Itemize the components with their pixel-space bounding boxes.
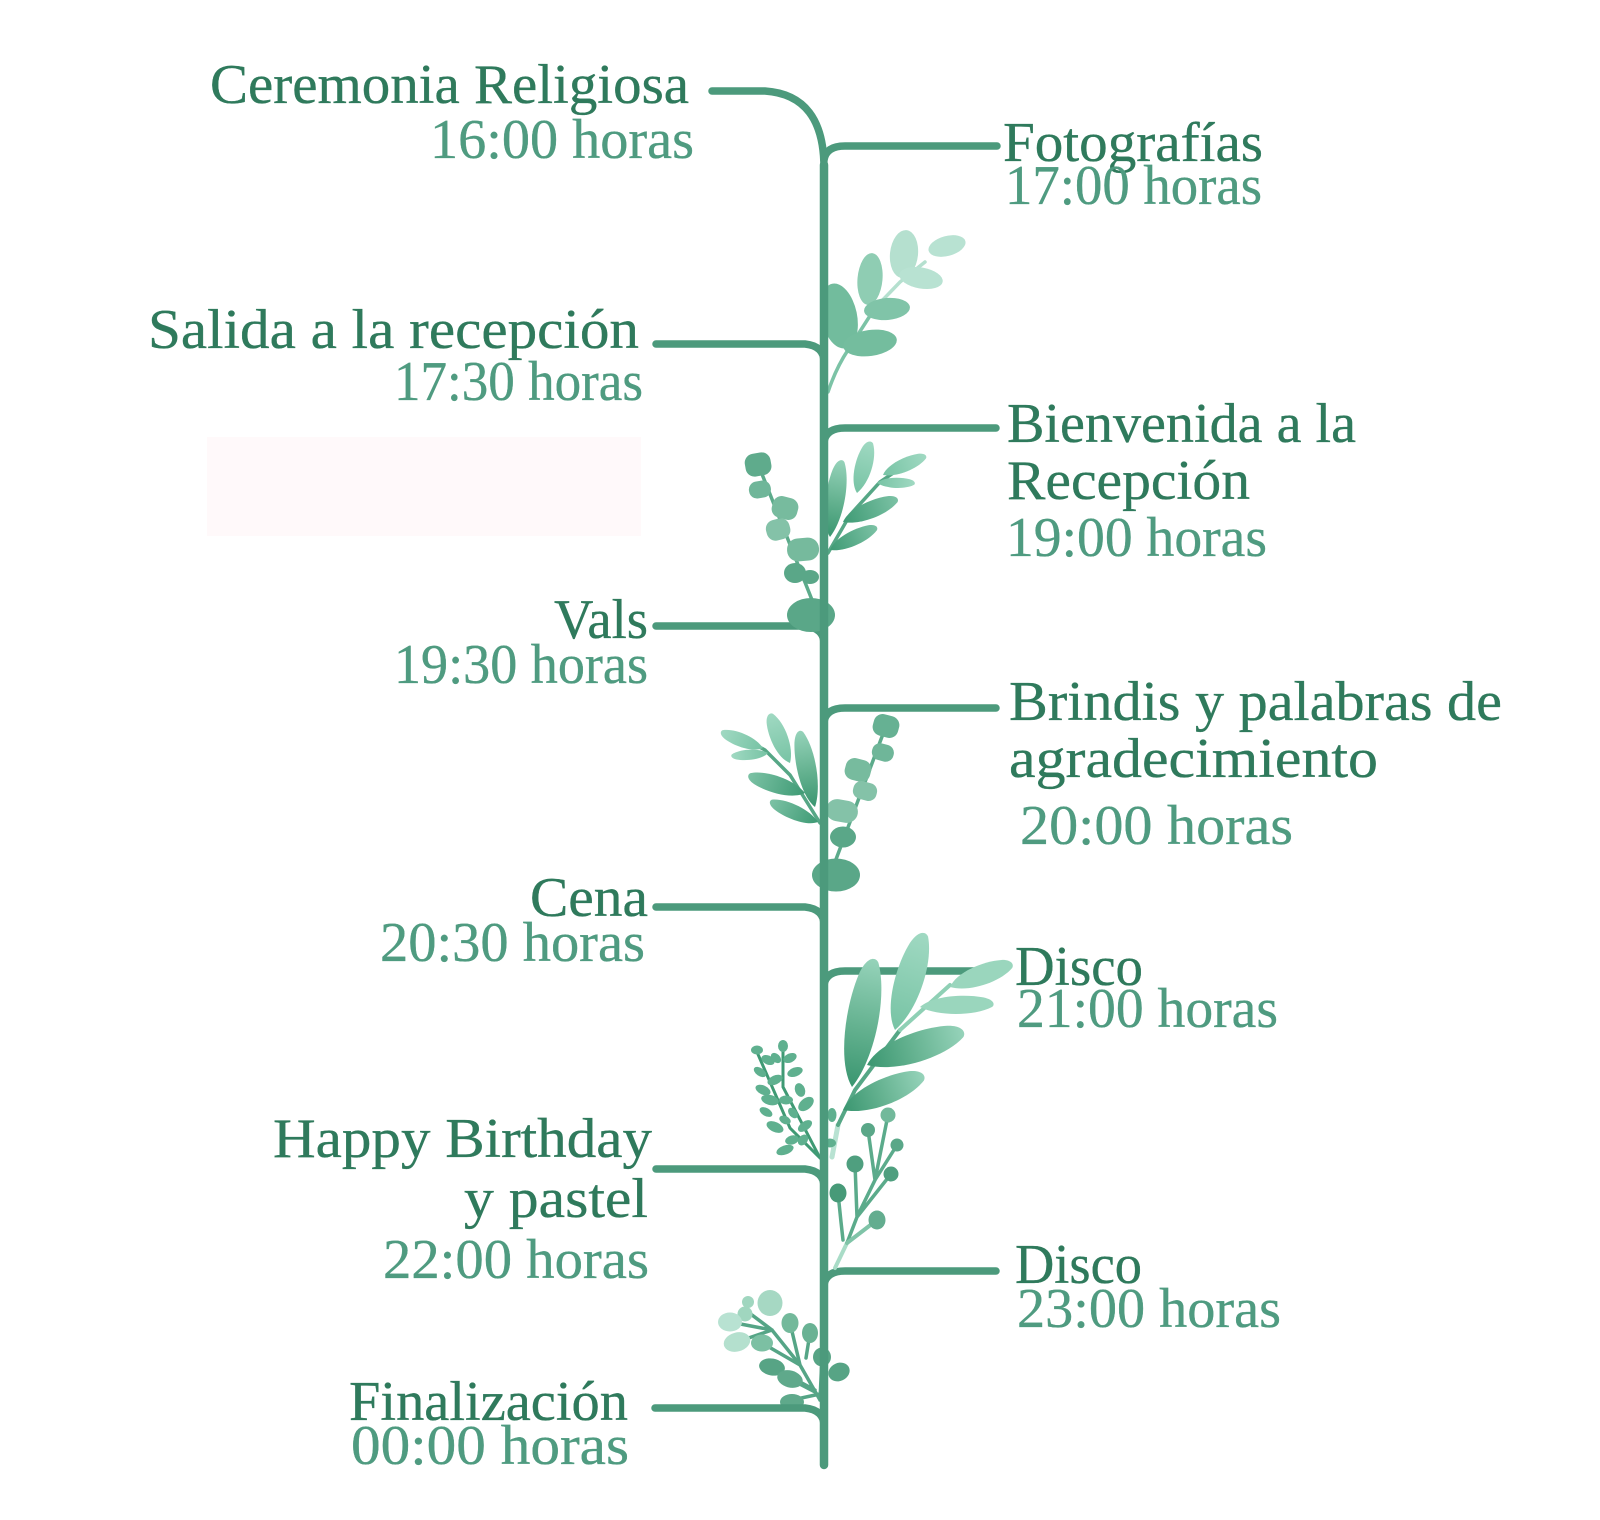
event: Ceremonia Religiosa: [210, 54, 694, 171]
event: Happy Birthday y pastel: y pastel: [464, 1168, 648, 1230]
event: Brindis y palabras de agradecimiento: 20:00 horas: [1020, 795, 1293, 857]
plant: left eucalyptus sprig: [743, 451, 835, 632]
plant: top oval-leaf sprig: [815, 229, 968, 392]
event: Vals: [394, 589, 648, 696]
plant: large leaf sprig: [832, 929, 1016, 1157]
event: Disco 21:00: Disco: [1015, 936, 1143, 998]
event: Finalización: [349, 1371, 629, 1477]
connector: Fotografías: [824, 146, 997, 160]
event: Cena: 20:30 horas: [380, 912, 645, 974]
event: Brindis y palabras de agradecimiento: [1009, 671, 1502, 857]
connector: Vals: [656, 626, 824, 644]
event: Disco 23:00: [1015, 1234, 1281, 1340]
connector: Finalización: [655, 1408, 824, 1426]
event: Cena: Cena: [530, 867, 648, 929]
event: Bienvenida a la Recepción: Recepción: [1007, 450, 1250, 512]
event: Bienvenida a la Recepción: Bienvenida a la: [1007, 393, 1356, 455]
pale pink rectangle: [207, 437, 641, 536]
plant: fern sprig: [751, 1040, 836, 1158]
plant: middle right eucalyptus sprig: [812, 712, 901, 892]
event: Finalización: Finalización: [349, 1371, 628, 1433]
event: Happy Birthday y pastel: Happy Birthday: [273, 1108, 652, 1170]
event: Vals: Vals: [554, 589, 648, 651]
event: Disco 23:00: 23:00 horas: [1017, 1278, 1281, 1340]
event: Disco 21:00: [1015, 936, 1278, 1040]
event: Bienvenida a la Recepción: [1006, 393, 1356, 569]
plant: bottom round-leaf sprig: [718, 1290, 853, 1410]
event: Salida a la recepción: 17:30 horas: [394, 351, 643, 413]
event: Disco 23:00: Disco: [1015, 1234, 1142, 1296]
event: Salida a la recepción: [148, 299, 643, 413]
plant: berry sprig: [830, 1108, 904, 1268]
event: Fotografías: 17:00 horas: [1005, 155, 1262, 217]
event: Brindis y palabras de agradecimiento: agradecimiento: [1009, 728, 1378, 790]
connector: Salida a la recepción: [656, 344, 824, 362]
connector: Disco 23:00: [824, 1271, 996, 1285]
event: Fotografías: [1003, 112, 1263, 217]
event: Disco 21:00: 21:00 horas: [1017, 978, 1278, 1040]
connector: Happy Birthday: [656, 1169, 824, 1187]
plant: middle left slender sprig: [718, 711, 822, 830]
event: Finalización: 00:00 horas: [351, 1415, 629, 1477]
connector: Ceremonia Religiosa: [712, 91, 824, 168]
event: Vals: 19:30 horas: [394, 634, 648, 696]
event: Brindis y palabras de agradecimiento: Brindis y palabras de: [1009, 671, 1502, 733]
connector: Cena: [656, 907, 824, 925]
event: Happy Birthday y pastel: 22:00 horas: [383, 1229, 649, 1291]
connector: Disco 21:00: [824, 971, 990, 985]
connector: Brindis: [824, 708, 996, 722]
event: Cena: [380, 867, 648, 974]
main vertical stem: [820, 165, 828, 1465]
event: Ceremonia Religiosa: 16:00 horas: [430, 109, 694, 171]
plant: upper right slender sprig: [818, 439, 929, 555]
event: Salida a la recepción: Salida a la recepción: [148, 299, 639, 361]
connector: Bienvenida a la Recepción: [824, 428, 996, 442]
event: Bienvenida a la Recepción: 19:00 horas: [1006, 507, 1267, 569]
event: Fotografías: Fotografías: [1003, 112, 1263, 174]
event: Ceremonia Religiosa: Ceremonia Religiosa: [210, 54, 689, 116]
event: Happy Birthday y pastel: [273, 1108, 652, 1291]
